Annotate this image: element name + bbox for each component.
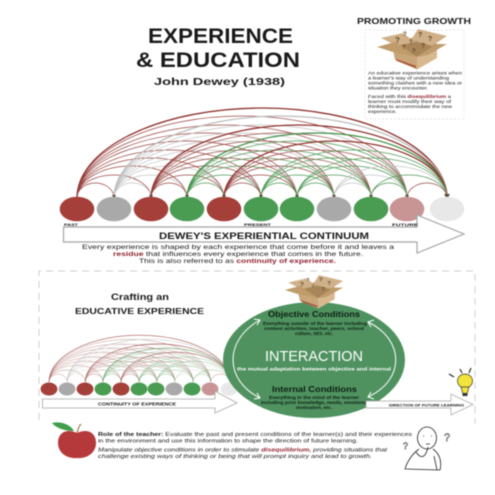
text: continuum explanation: This is also referred to as continuity of experience. — [139, 258, 336, 265]
arrow: continuity of experience — [42, 391, 237, 413]
icon: cardboard box with question marks: ? — [412, 49, 416, 55]
experience circles: small continuum — [41, 382, 237, 396]
timeline labels: PAST — [64, 223, 79, 227]
text: internal conditions: Everything in the mind of the learner — [269, 395, 359, 400]
text: disequilibrium explanation: thinking to accommodate the new — [368, 104, 453, 110]
icon: cardboard box with question marks: ? — [418, 32, 422, 39]
text: internal conditions — [261, 385, 368, 410]
label: continuity of experience: CONTINUITY OF EXPERIENCE — [98, 402, 177, 408]
icon: thinking person: ? — [403, 441, 408, 451]
text: disequilibrium explanation: situation they encounter. — [368, 86, 428, 92]
text: internal conditions: motivation, etc. — [296, 405, 332, 410]
timeline labels: FUTURE — [392, 223, 419, 227]
text: internal conditions: Internal Conditions — [272, 385, 358, 394]
chart: Dewey's experiential continuum arcs — [77, 108, 447, 198]
text: interaction — [237, 348, 391, 372]
heading: continuum: DEWEY'S EXPERIENTIAL CONTINUUM — [159, 231, 369, 242]
text: objective conditions: Everything outside of the learner including — [263, 321, 367, 326]
arrows: interaction cycle — [233, 319, 396, 399]
icon: apple — [52, 422, 96, 458]
text: disequilibrium explanation: learner must modify their way of — [368, 99, 452, 105]
icon: thinking person — [403, 427, 450, 470]
text: role of the teacher — [98, 432, 412, 460]
icon: cardboard box on ellipse — [285, 275, 343, 309]
heading: crafting — [75, 292, 204, 316]
heading: crafting: Crafting an — [111, 292, 169, 302]
icon: cardboard box on ellipse: ? — [327, 281, 331, 287]
icon: cardboard box on ellipse: ? — [311, 284, 315, 290]
text: role of the teacher: Manipulate objective conditions in order to stimulate disequilibrium, providing situations that — [98, 448, 387, 454]
arrow: direction of future learning — [366, 394, 473, 415]
icon: cardboard box with question marks: ? — [428, 36, 432, 43]
heading: crafting: EDUCATIVE EXPERIENCE — [75, 306, 204, 316]
text: objective conditions: Objective Conditions — [268, 310, 361, 319]
dashed frame — [365, 30, 464, 119]
text: continuum explanation — [82, 244, 395, 265]
text: interaction: the mutual adaptation between objective and internal — [237, 366, 391, 372]
heading: promoting growth: PROMOTING GROWTH — [357, 16, 471, 26]
icon: cardboard box on ellipse: ? — [319, 278, 323, 284]
icon: cardboard box on ellipse: ? — [321, 287, 325, 293]
experience circles: main continuum — [60, 197, 464, 221]
text: objective conditions — [263, 310, 367, 336]
text: disequilibrium explanation: An educative experience arises when — [368, 70, 462, 76]
icon: cardboard box with question marks: ? — [409, 40, 413, 46]
arrow: continuum — [64, 215, 464, 253]
text: objective conditions: content activities, teacher, peers, school — [264, 326, 364, 331]
icon: light bulb — [449, 368, 472, 396]
text: disequilibrium explanation — [368, 70, 462, 115]
icon: thinking person: ? — [444, 432, 450, 444]
subtitle: author: John Dewey (1938) — [154, 76, 285, 88]
arrowheads on arcs — [112, 194, 450, 199]
text: disequilibrium explanation: Faced with this disequilibrium a — [368, 94, 451, 100]
text: continuum explanation: residue that influences every experience that comes in the future. — [113, 251, 363, 258]
text: role of the teacher: challenge existing ways of thinking or being that will prompt inquiry and lead to growth. — [98, 454, 372, 460]
text: internal conditions: including prior knowledge, needs, emotions, — [261, 400, 368, 405]
label: direction of future learning: DIRECTION OF FUTURE LEARNING — [389, 404, 464, 408]
text: disequilibrium explanation: a learner's way of understanding — [368, 76, 449, 82]
title — [136, 25, 300, 72]
icon: cardboard box with question marks — [377, 29, 447, 70]
timeline labels: PRESENT — [244, 223, 272, 227]
diagram: interaction ellipse — [223, 302, 405, 418]
green ellipse — [223, 302, 405, 418]
icon: cardboard box on ellipse: ? — [300, 282, 304, 289]
text: objective conditions: culture, SES, etc. — [295, 331, 333, 336]
text: disequilibrium explanation: experience. — [368, 109, 397, 115]
panel frame: crafting an educative experience — [39, 271, 475, 424]
icon: cardboard box on ellipse: ? — [306, 277, 310, 283]
text: continuum explanation: Every experience is shaped by each experience that come before it and leaves a — [82, 244, 395, 251]
chart: continuity arcs small — [49, 335, 230, 382]
text: disequilibrium explanation: something clashes with a new idea or — [368, 80, 462, 86]
title: & EDUCATION — [136, 49, 300, 72]
timeline labels — [64, 223, 419, 227]
icon: cardboard box with question marks: ? — [421, 43, 425, 50]
text: role of the teacher: Role of the teacher: Evaluate the past and present conditions of the learner(s) and their experiences — [98, 432, 412, 438]
icon: cardboard box with question marks: ? — [403, 32, 407, 38]
title: EXPERIENCE — [148, 25, 293, 48]
icon: cardboard box with question marks: ? — [395, 36, 400, 45]
text: interaction: INTERACTION — [265, 348, 363, 365]
panel: promoting growth — [357, 16, 471, 119]
text: role of the teacher: in the environment and use this information to shape the direction of future learning. — [98, 438, 358, 444]
icon: cardboard box with question marks: ? — [402, 45, 406, 51]
